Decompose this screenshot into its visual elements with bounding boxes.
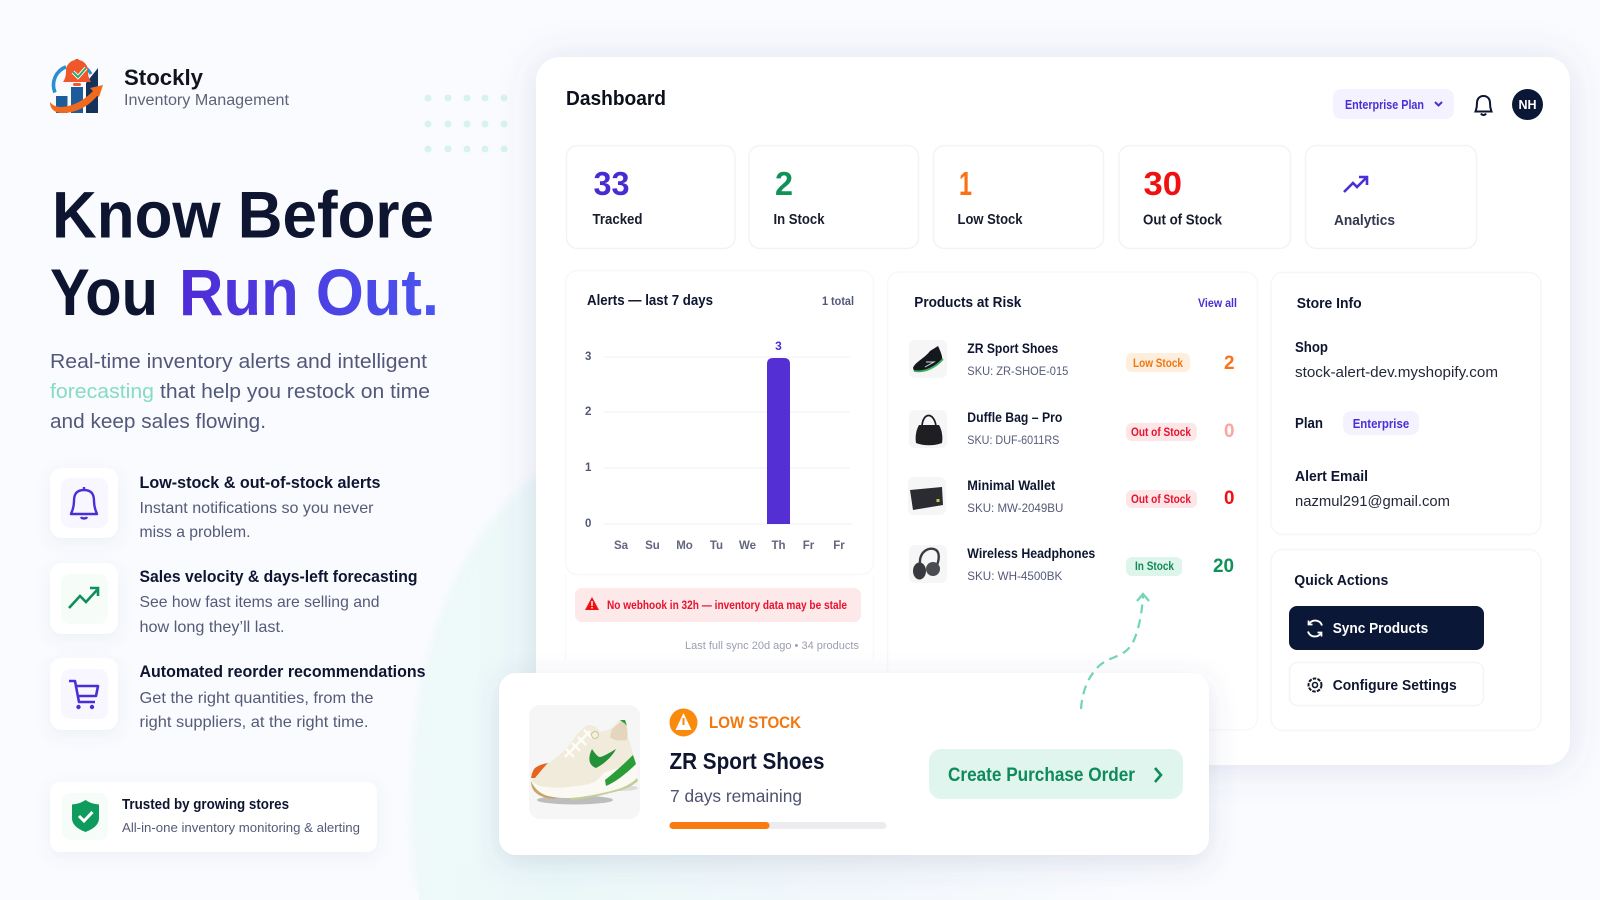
stat card: in stock — [749, 146, 918, 248]
bar chart: Tu — [710, 540, 723, 552]
avatar — [1512, 89, 1543, 120]
stat card: tracked — [566, 146, 735, 248]
product row: wallet: 0 — [1224, 488, 1234, 509]
title — [50, 178, 439, 329]
panel: quick actions — [1271, 550, 1541, 730]
warning banner: No webhook in 32h — inventory data may be stale — [607, 600, 847, 612]
subtitle paragraph: that help you restock on time — [160, 381, 430, 403]
product row: headphones: In Stock — [1135, 561, 1175, 573]
feature: forecasting — [50, 563, 418, 636]
progress bar — [670, 822, 886, 829]
feature heading: Automated reorder recommendations — [140, 663, 426, 681]
product row: wallet: Minimal Wallet — [967, 478, 1056, 493]
product row: wallet — [908, 477, 1234, 515]
product row: headphones: 20 — [1213, 556, 1234, 577]
subtitle paragraph — [50, 351, 430, 433]
feature heading: Low-stock & out-of-stock alerts — [140, 474, 380, 492]
trust title: Trusted by growing stores — [122, 797, 289, 813]
plan dropdown: Enterprise Plan — [1345, 98, 1424, 112]
shop field: stock-alert-dev.myshopify.com — [1295, 364, 1498, 381]
stat card: in stock: In Stock — [774, 212, 825, 228]
bar chart: Th — [771, 540, 786, 552]
product row: duffle bag: Duffle Bag – Pro — [967, 410, 1062, 425]
plan dropdown — [1333, 89, 1454, 119]
feature: reorder — [50, 658, 426, 731]
feature heading: Sales velocity & days-left forecasting — [140, 568, 418, 586]
icon: shield — [62, 793, 108, 840]
bar chart: Su — [645, 540, 660, 552]
icon: bell — [50, 468, 118, 538]
plan field — [1295, 411, 1419, 435]
create purchase order button: Create Purchase Order — [948, 765, 1136, 786]
product row: headphones — [909, 545, 1234, 583]
chart heading: Alerts — last 7 days — [587, 293, 713, 309]
alert email field: nazmul291@gmail.com — [1295, 493, 1450, 510]
panel: alerts chart — [566, 270, 874, 660]
feature description — [140, 690, 374, 731]
trust subtitle: All-in-one inventory monitoring & alerting — [122, 820, 360, 835]
feature description: right suppliers, at the right time. — [140, 714, 368, 731]
panel: low stock floating card — [499, 673, 1209, 855]
plan field: Enterprise — [1353, 417, 1409, 431]
product row: shoes: 2 — [1224, 353, 1234, 374]
panel: dashboard — [536, 57, 1570, 765]
alert email field: Alert Email — [1295, 469, 1368, 485]
sync products button — [1289, 606, 1484, 650]
bar chart: 2 — [585, 406, 591, 418]
product row: shoes: Low Stock — [1133, 358, 1184, 370]
bar chart: Fr — [833, 540, 845, 552]
product row: shoes — [909, 340, 1234, 378]
warning banner — [575, 588, 861, 622]
stat card: in stock: 2 — [775, 165, 793, 202]
product row: shoes: ZR Sport Shoes — [967, 341, 1058, 356]
product row: duffle bag — [909, 410, 1234, 448]
product row: shoes: SKU: ZR-SHOE-015 — [967, 364, 1069, 378]
store info heading: Store Info — [1297, 296, 1362, 312]
shop field: Shop — [1295, 340, 1328, 356]
trust card — [50, 782, 377, 852]
product photo: sneaker — [529, 705, 640, 819]
title: You — [50, 255, 158, 329]
icon: cart — [50, 658, 118, 730]
stat card: out of stock: 30 — [1144, 165, 1182, 202]
product row: duffle bag: Out of Stock — [1131, 427, 1192, 439]
feature description: how long they’ll last. — [140, 619, 284, 636]
bar chart: Fr — [803, 540, 815, 552]
configure settings button — [1290, 662, 1484, 706]
product row: wallet: SKU: MW-2049BU — [967, 501, 1063, 515]
feature description: See how fast items are selling and — [140, 594, 380, 611]
stat card: tracked: 33 — [594, 165, 630, 202]
shop field — [1295, 340, 1498, 381]
brand tagline: Inventory Management — [124, 92, 290, 109]
stat card: low stock — [934, 146, 1104, 248]
bar chart: 3 — [775, 339, 782, 353]
product row: duffle bag: SKU: DUF-6011RS — [967, 433, 1059, 447]
stat card: low stock: Low Stock — [958, 212, 1023, 228]
avatar: NH — [1518, 98, 1537, 112]
feature description: Instant notifications so you never — [140, 500, 374, 517]
status label: LOW STOCK — [709, 713, 802, 732]
feature description: Get the right quantities, from the — [140, 690, 374, 707]
stat card: low stock: 1 — [959, 165, 972, 202]
feature: alerts — [50, 468, 380, 541]
plan field: Plan — [1295, 416, 1323, 432]
icon: logo mark — [50, 59, 103, 113]
bar chart: Sa — [614, 540, 629, 552]
brand logo — [50, 59, 290, 113]
brand name: Stockly — [124, 65, 204, 90]
stat card: tracked: Tracked — [592, 212, 642, 228]
bar chart: Mo — [676, 540, 693, 552]
bar chart — [585, 339, 852, 552]
product row: headphones: Wireless Headphones — [967, 546, 1095, 561]
feature description — [140, 594, 380, 636]
decorative dot grid — [424, 94, 508, 152]
panel: products at risk — [888, 272, 1258, 730]
icon: trend line — [50, 563, 118, 634]
product row: headphones: SKU: WH-4500BK — [967, 569, 1062, 583]
stat card: out of stock: Out of Stock — [1143, 212, 1223, 228]
days remaining: 7 days remaining — [670, 786, 802, 806]
title: Know Before — [52, 178, 434, 252]
create purchase order button — [929, 749, 1183, 799]
icon: notification bell — [1476, 96, 1492, 115]
feature description — [140, 500, 374, 541]
last sync note: Last full sync 20d ago • 34 products — [685, 640, 859, 652]
icon: warning badge — [670, 708, 698, 736]
feature description: miss a problem. — [140, 524, 250, 541]
view all link: View all — [1198, 298, 1237, 310]
dashboard heading: Dashboard — [566, 87, 666, 110]
alert email field — [1295, 469, 1450, 510]
arrow: dashed curve to in stock — [1081, 594, 1149, 709]
stat card: out of stock — [1119, 146, 1290, 248]
stat card: analytics: Analytics — [1334, 213, 1395, 229]
chart total: 1 total — [822, 296, 854, 308]
panel: store info — [1271, 272, 1541, 534]
product name: ZR Sport Shoes — [670, 748, 824, 774]
configure settings button: Configure Settings — [1333, 678, 1457, 694]
title: Run Out. — [179, 255, 439, 329]
stat card: analytics — [1306, 146, 1476, 248]
bar chart: We — [739, 540, 756, 552]
subtitle paragraph: forecasting — [50, 381, 154, 403]
product row: duffle bag: 0 — [1224, 421, 1234, 442]
quick actions heading: Quick Actions — [1294, 573, 1388, 589]
product row: wallet: Out of Stock — [1131, 494, 1192, 506]
bar chart: 3 — [585, 351, 591, 363]
bar chart: 1 — [585, 462, 592, 474]
sync products button: Sync Products — [1333, 621, 1428, 637]
products heading: Products at Risk — [914, 295, 1022, 311]
subtitle paragraph: Real-time inventory alerts and intelligent — [50, 351, 427, 373]
bar chart: 0 — [585, 518, 591, 530]
subtitle paragraph: and keep sales flowing. — [50, 411, 266, 433]
